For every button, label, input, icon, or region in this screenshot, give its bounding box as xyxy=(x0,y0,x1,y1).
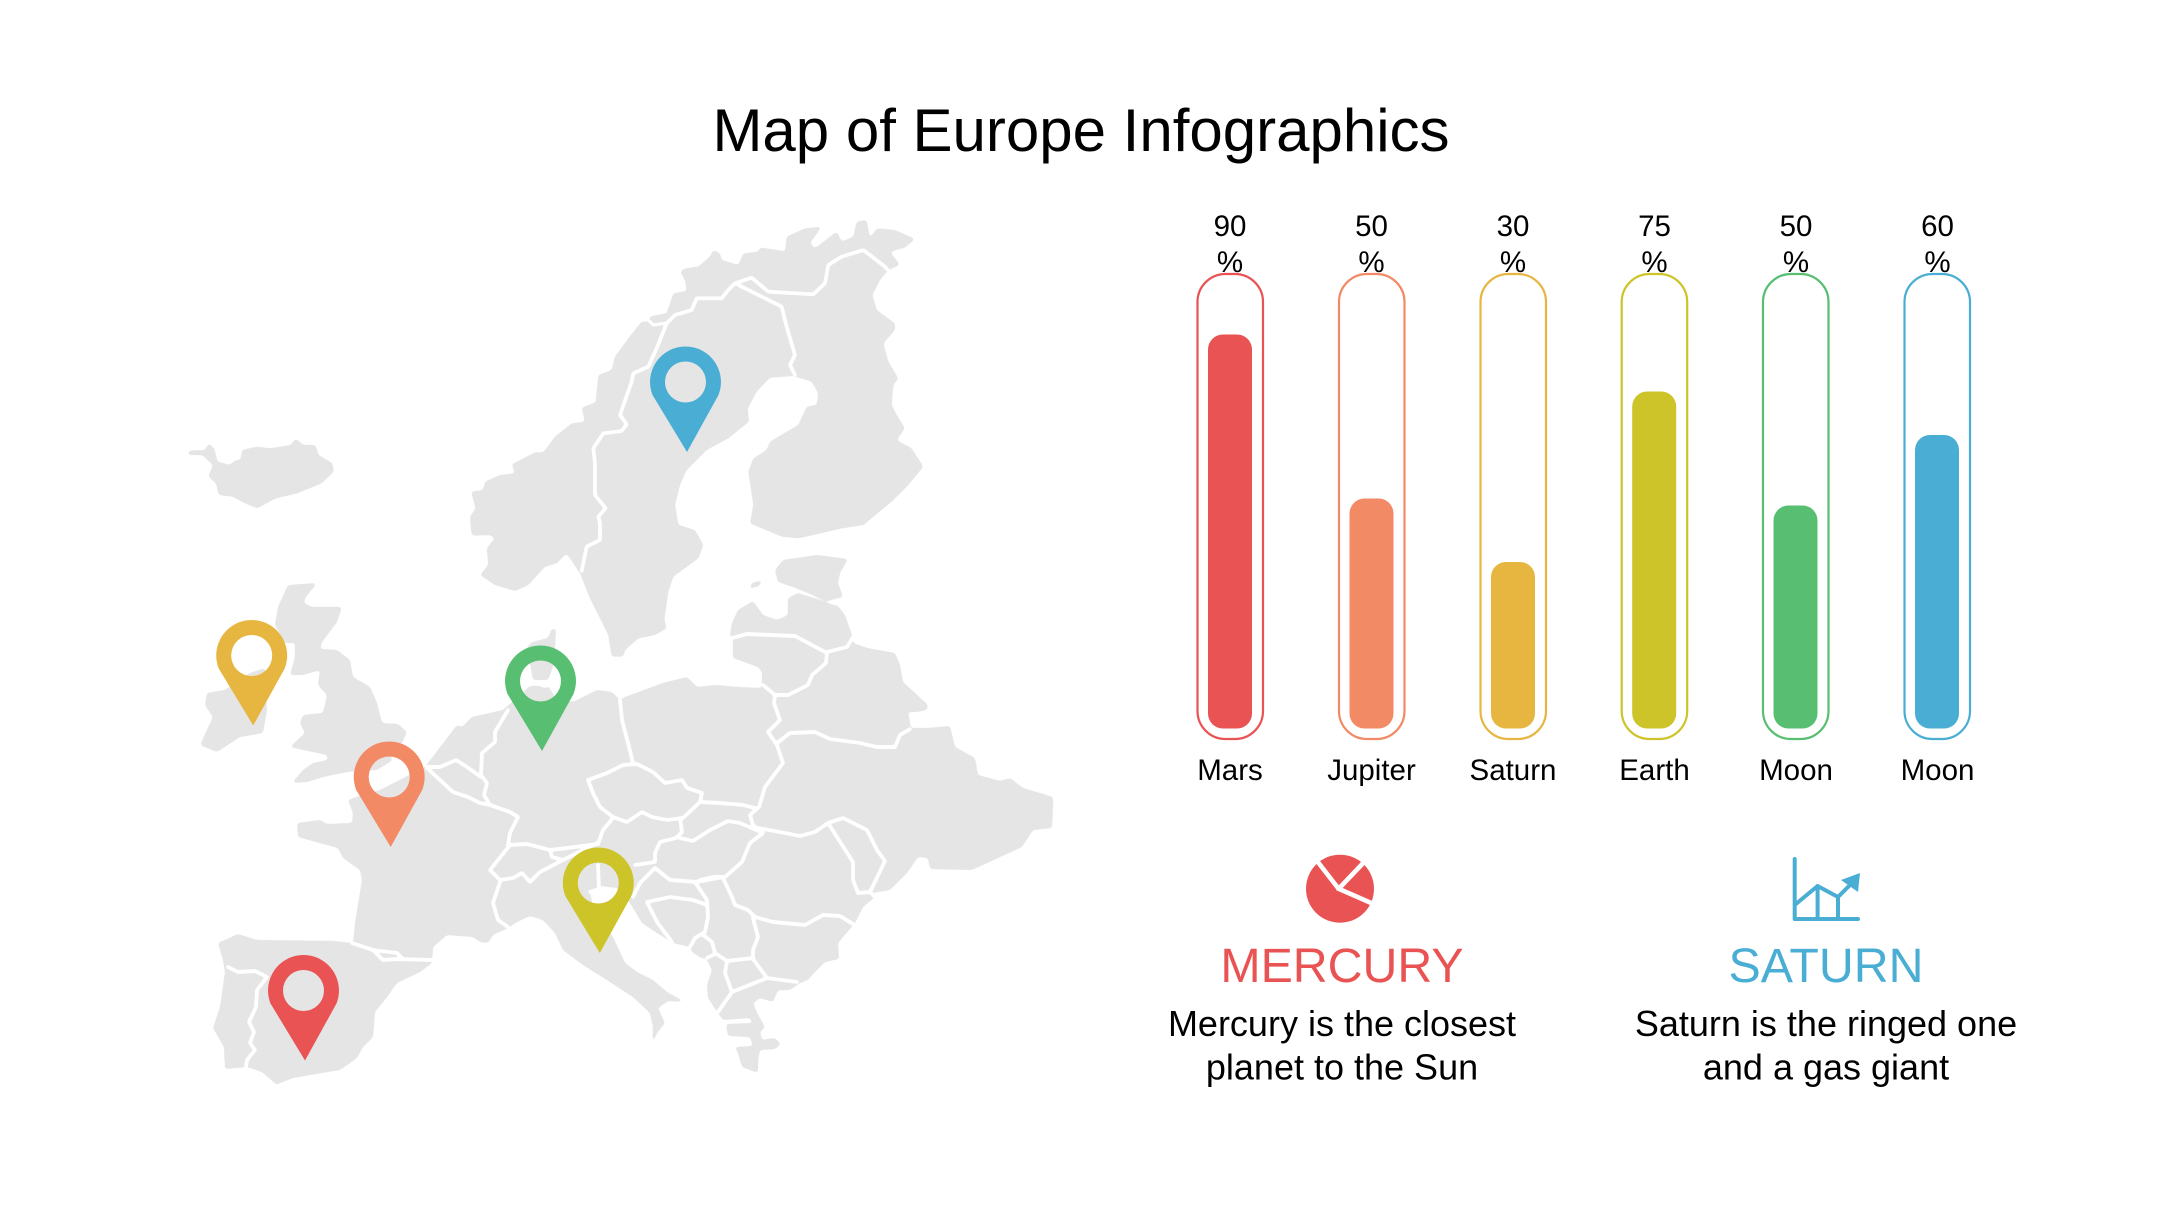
bar: Moon 60%: % xyxy=(1924,246,1951,279)
title: Map of Europe Infographics xyxy=(712,97,1450,164)
text: Mercury description: planet to the Sun xyxy=(1206,1046,1478,1088)
bar: Saturn 30%: 30 xyxy=(1497,210,1529,243)
bar: Mars 90%: 90 xyxy=(1214,210,1246,243)
bar: Mars 90% xyxy=(1197,210,1263,787)
map: country borders xyxy=(228,250,910,1067)
pin: orange, France xyxy=(354,742,425,847)
pin: yellow, Ireland xyxy=(216,620,287,726)
icon: growth chart xyxy=(1795,859,1860,919)
bar: Saturn 30%: % xyxy=(1500,246,1526,279)
bar: Jupiter 50% xyxy=(1327,210,1416,787)
bar: Mars 90%: Mars xyxy=(1197,754,1263,787)
bar: Moon 50%: % xyxy=(1783,246,1809,279)
bar: Moon 60% xyxy=(1901,210,1974,787)
pin: olive, Italy xyxy=(563,848,634,953)
bar: Earth 75%: % xyxy=(1641,246,1668,279)
text: Saturn description: and a gas giant xyxy=(1703,1046,1949,1088)
heading: Mercury: MERCURY xyxy=(1220,939,1464,993)
bar: Earth 75%: Earth xyxy=(1619,754,1690,787)
text: Mercury description: Mercury is the closest xyxy=(1168,1003,1516,1044)
bar: Jupiter 50%: % xyxy=(1358,246,1385,279)
bar: Mars 90%: % xyxy=(1217,246,1243,279)
bar: Earth 75%: 75 xyxy=(1638,210,1671,243)
bar: Earth 75% xyxy=(1619,210,1690,787)
icon: pie chart xyxy=(1306,855,1378,923)
bar: Moon 60%: Moon xyxy=(1901,754,1974,787)
map: land masses xyxy=(187,220,1053,1085)
panel: Saturn xyxy=(1635,859,2017,1088)
map of Europe xyxy=(187,220,1053,1085)
bar: Jupiter 50%: Jupiter xyxy=(1327,754,1416,787)
bar: Moon 50% xyxy=(1759,210,1833,787)
bar: Saturn 30%: Saturn xyxy=(1470,754,1556,787)
pin: green, Germany xyxy=(505,646,576,751)
bar: Moon 50%: Moon xyxy=(1759,754,1833,787)
bar: Moon 50%: 50 xyxy=(1780,210,1812,243)
bar: Moon 60%: 60 xyxy=(1921,210,1954,243)
panel: Mercury xyxy=(1168,855,1516,1088)
bar chart xyxy=(1197,210,1974,787)
bar: Saturn 30% xyxy=(1470,210,1556,787)
bar: Jupiter 50%: 50 xyxy=(1355,210,1388,243)
heading: Saturn: SATURN xyxy=(1729,939,1923,993)
pin: red, Spain xyxy=(268,955,339,1060)
text: Saturn description: Saturn is the ringed one xyxy=(1635,1003,2017,1044)
pin: blue, Sweden xyxy=(650,346,721,452)
